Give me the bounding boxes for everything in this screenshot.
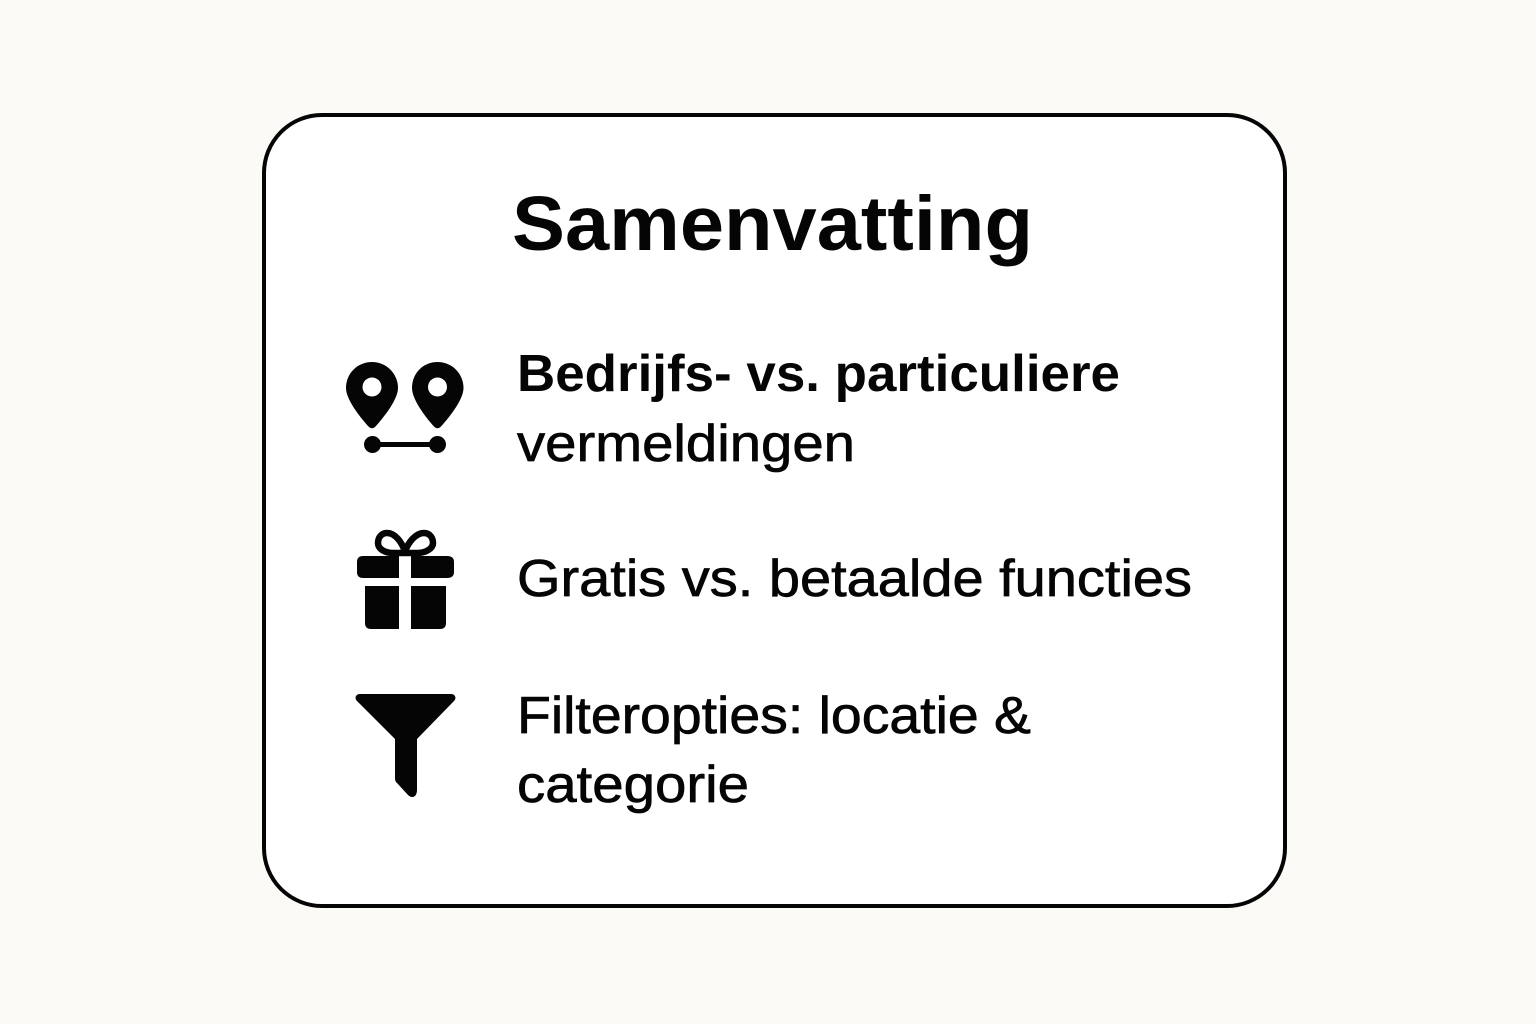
text: filter options: Filteropties: locatie &	[517, 687, 1031, 745]
text: free vs paid features: Gratis vs. betaalde functies	[517, 550, 1192, 608]
panel: summary card	[264, 115, 1285, 906]
text: filter options	[517, 687, 1031, 814]
text: business vs private listings: vermeldingen	[517, 415, 855, 473]
icon: gift box	[357, 533, 454, 629]
icon: two map pins with connecting line	[346, 362, 464, 453]
icon: funnel filter	[356, 694, 455, 797]
text: business vs private listings	[517, 345, 1120, 473]
text: business vs private listings: Bedrijfs- vs. particuliere	[517, 345, 1120, 403]
text: filter options: categorie	[517, 756, 749, 814]
title: Samenvatting	[512, 181, 1033, 267]
